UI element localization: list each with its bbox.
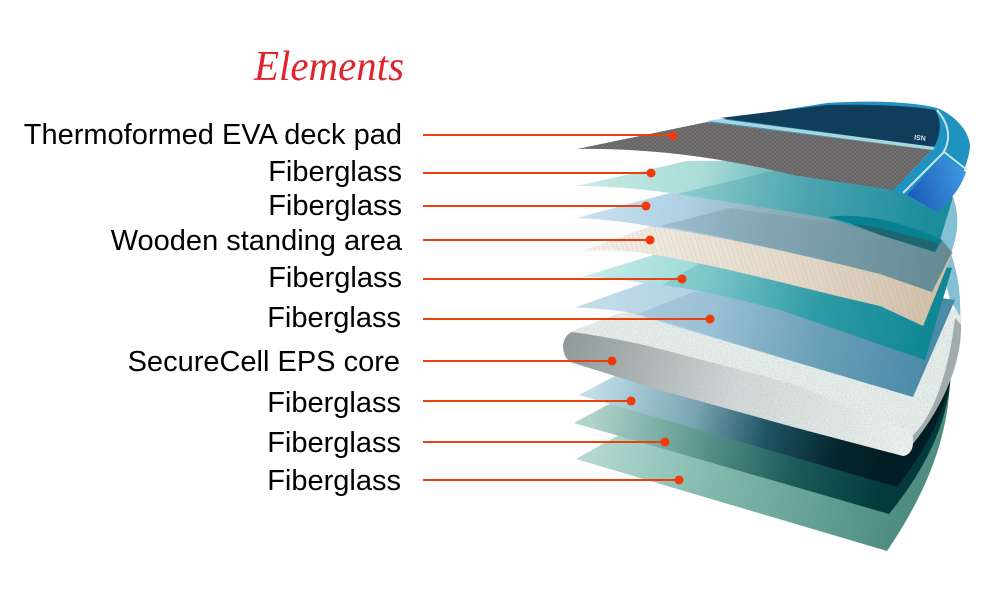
layer: deck pad and nose [577,102,970,212]
layer: EPS core [563,296,961,456]
layer: fiberglass 4 [575,265,955,397]
labels [24,119,403,497]
label: fiberglass 7: Fiberglass [267,465,401,497]
leader: fiberglass 7 [423,479,679,481]
core top surface [570,296,961,442]
label: deck pad: Thermoformed EVA deck pad [24,119,402,151]
title: Elements [253,44,404,90]
label: fiberglass 6: Fiberglass [267,427,401,459]
leader lines [423,135,710,480]
leader: fiberglass 4 [423,318,710,320]
label: fiberglass 1: Fiberglass [268,156,402,188]
fiberglass 4 overlap [638,292,955,397]
fiberglass 1 overlap [677,160,953,252]
fiberglass dark band [850,223,938,252]
layer: fiberglass 3 [582,240,952,360]
board layers [563,102,970,551]
leader: fiberglass 3 [423,278,682,280]
fiberglass 3 overlap [662,263,952,360]
layer: lower fiberglass 2 [574,370,951,514]
label: fiberglass 2: Fiberglass [268,190,402,222]
leader: fiberglass 1 [423,172,651,174]
layer: lower fiberglass 1 [579,345,952,487]
layer: fiberglass 1 [577,160,953,252]
label: fiberglass 3: Fiberglass [268,262,402,294]
label: EPS core: SecureCell EPS core [128,346,400,378]
light stripe [707,119,935,150]
brand mark: NSI [914,133,926,141]
leader: wood [423,239,650,241]
nose stripes [903,110,967,193]
layer: far-side fiberglass edge [935,197,960,316]
fiberglass lens [827,216,942,252]
leader: fiberglass 6 [423,441,665,443]
fiberglass 2 overlap [660,208,952,292]
nose rail [707,102,970,212]
label: fiberglass 5: Fiberglass [267,387,401,419]
blue nose panel [907,155,966,212]
layer: wood standing area [582,215,953,326]
core right edge [912,318,961,445]
core front face [563,332,913,456]
layer: fiberglass 2 [577,185,952,292]
leader: fiberglass 2 [423,205,646,207]
grey pad [577,122,932,190]
navy deck [720,105,940,147]
leader dots [608,132,714,484]
leader: fiberglass 5 [423,400,631,402]
leader: EPS core [423,360,612,362]
leader: deck pad [423,134,673,136]
label: wood: Wooden standing area [111,225,403,257]
layer: bottom fiberglass [576,380,950,551]
label: fiberglass 4: Fiberglass [267,302,401,334]
